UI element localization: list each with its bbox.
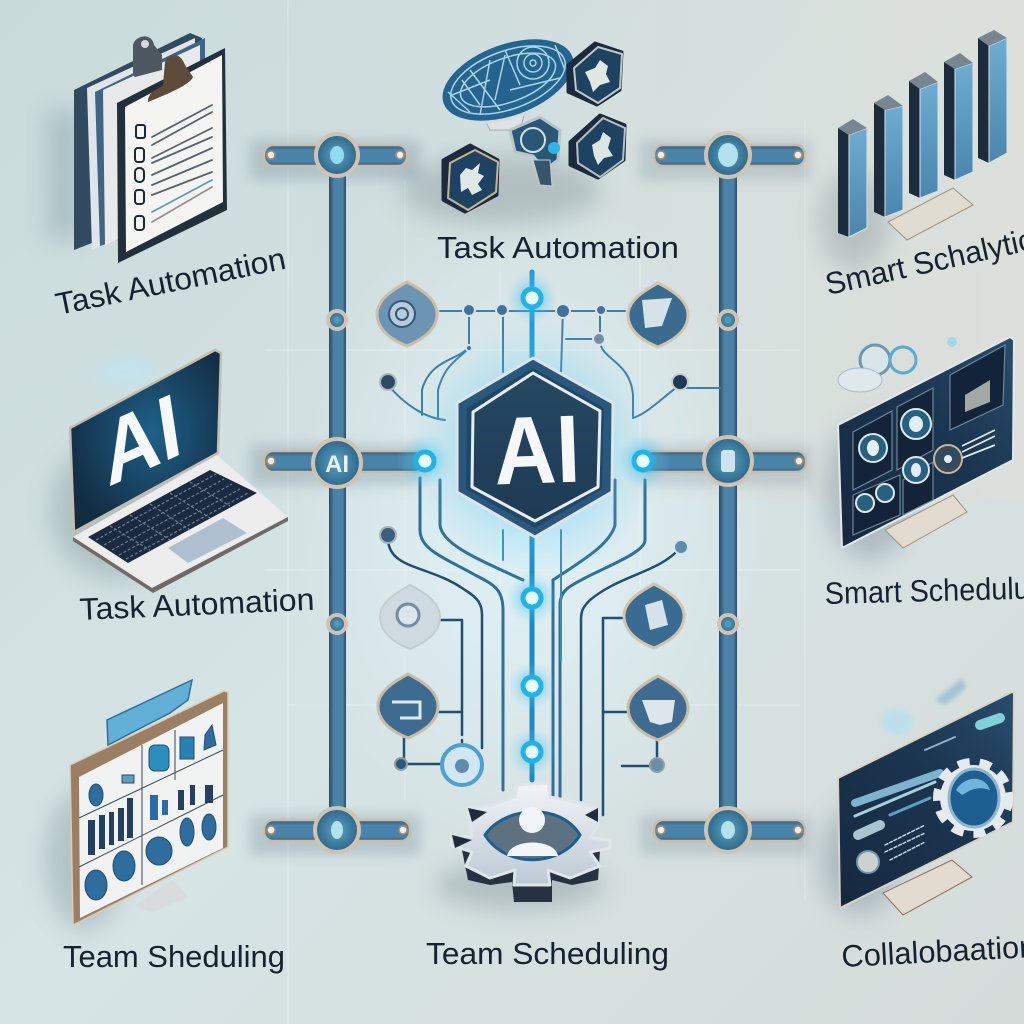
frame badges: AI — [325, 451, 349, 478]
icon: hex chips — [443, 43, 625, 212]
panel: bar chart top right — [820, 30, 1007, 270]
icon: gear — [937, 762, 1009, 834]
label: Task Automation left middle: Task Automation — [79, 582, 315, 627]
laptop screen AI: AI — [96, 373, 187, 506]
central AI hexagon — [409, 320, 659, 580]
icon: brain — [430, 21, 586, 139]
panel: team scheduling board — [45, 680, 228, 930]
panel: top center AI icons — [400, 21, 625, 225]
panel: collaboration monitor with gear — [820, 678, 1014, 915]
label: Team Scheduling center: Team Scheduling — [426, 936, 669, 971]
frame badges — [313, 133, 752, 852]
bar chart — [838, 30, 1007, 237]
icon: floating holograms — [838, 337, 957, 392]
circuit wires — [388, 272, 720, 815]
icon: clips — [133, 36, 162, 77]
center AI label: AI — [492, 396, 582, 505]
small circuit nodes — [380, 304, 688, 772]
label: Team Sheduling left: Team Sheduling — [63, 939, 285, 974]
connector frame: vertical and horizontal bars — [250, 140, 810, 855]
icon: floating hologram — [881, 678, 966, 735]
panel: gear with person — [435, 783, 610, 910]
panel: laptop — [50, 350, 288, 593]
panel: dashboard monitor right — [825, 337, 1014, 560]
bar chart icon — [88, 785, 213, 855]
icon: glow above laptop — [95, 356, 155, 388]
label: Task Automation top center: Task Automation — [437, 230, 679, 265]
circuit badges around hub — [377, 282, 688, 785]
checklist lines — [152, 105, 212, 222]
icon: blue ticket — [107, 680, 192, 745]
panel: clipboards top left — [45, 33, 227, 263]
icon: brown clip — [148, 55, 193, 102]
label: Task Automation left top: Task Automation — [52, 241, 289, 322]
glowing cyan nodes — [397, 272, 671, 776]
